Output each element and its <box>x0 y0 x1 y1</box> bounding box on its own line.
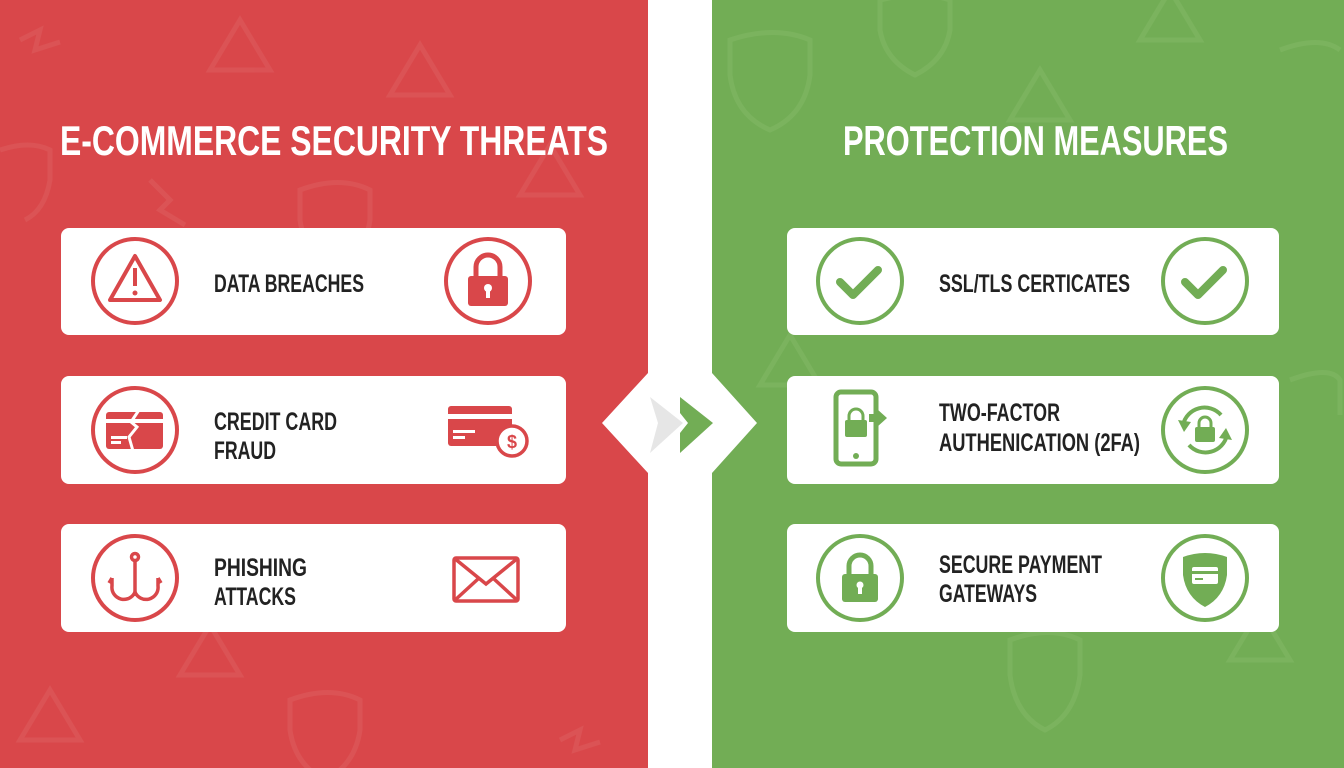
icon: broken card circle <box>93 388 177 472</box>
arrow: gray chevron <box>650 397 683 453</box>
icon: phone with lock <box>836 392 887 464</box>
card: ssl/tls <box>787 228 1279 335</box>
title: threats: E-COMMERCE SECURITY THREATS <box>60 117 608 164</box>
text <box>214 554 307 611</box>
icon: hook circle <box>93 536 177 620</box>
text: PHISHING <box>214 554 307 582</box>
icon: card with dollar: $ <box>507 432 517 452</box>
card: credit card fraud <box>61 376 566 484</box>
card: data breaches <box>61 228 566 335</box>
icon: card with dollar <box>448 406 527 456</box>
text: FRAUD <box>214 437 276 465</box>
icon: sync lock circle <box>1163 388 1247 472</box>
text: CREDIT CARD <box>214 408 337 436</box>
card: secure payment gateways <box>787 524 1279 632</box>
icon: check circle right <box>1163 239 1247 323</box>
text: GATEWAYS <box>939 580 1037 608</box>
icon: lock circle <box>818 536 902 620</box>
text: ATTACKS <box>214 583 296 611</box>
text: AUTHENICATION (2FA) <box>939 429 1140 457</box>
icon: warning circle <box>93 239 177 323</box>
card: two-factor <box>787 376 1279 484</box>
text: SECURE PAYMENT <box>939 551 1102 579</box>
icon: padlock circle <box>446 239 530 323</box>
panel: threats background <box>0 0 648 768</box>
text: DATA BREACHES <box>214 270 364 298</box>
text: SSL/TLS CERTICATES <box>939 270 1130 298</box>
text <box>939 551 1102 608</box>
center divider with arrows <box>602 0 757 768</box>
text <box>939 399 1140 457</box>
arrow: green chevron <box>680 397 713 453</box>
icon: check circle left <box>818 239 902 323</box>
icon: envelope <box>454 558 518 601</box>
panel: protection background <box>712 0 1344 768</box>
text: TWO-FACTOR <box>939 399 1060 427</box>
card: phishing attacks <box>61 524 566 632</box>
icon: shield card circle <box>1163 536 1247 620</box>
text <box>214 408 337 465</box>
